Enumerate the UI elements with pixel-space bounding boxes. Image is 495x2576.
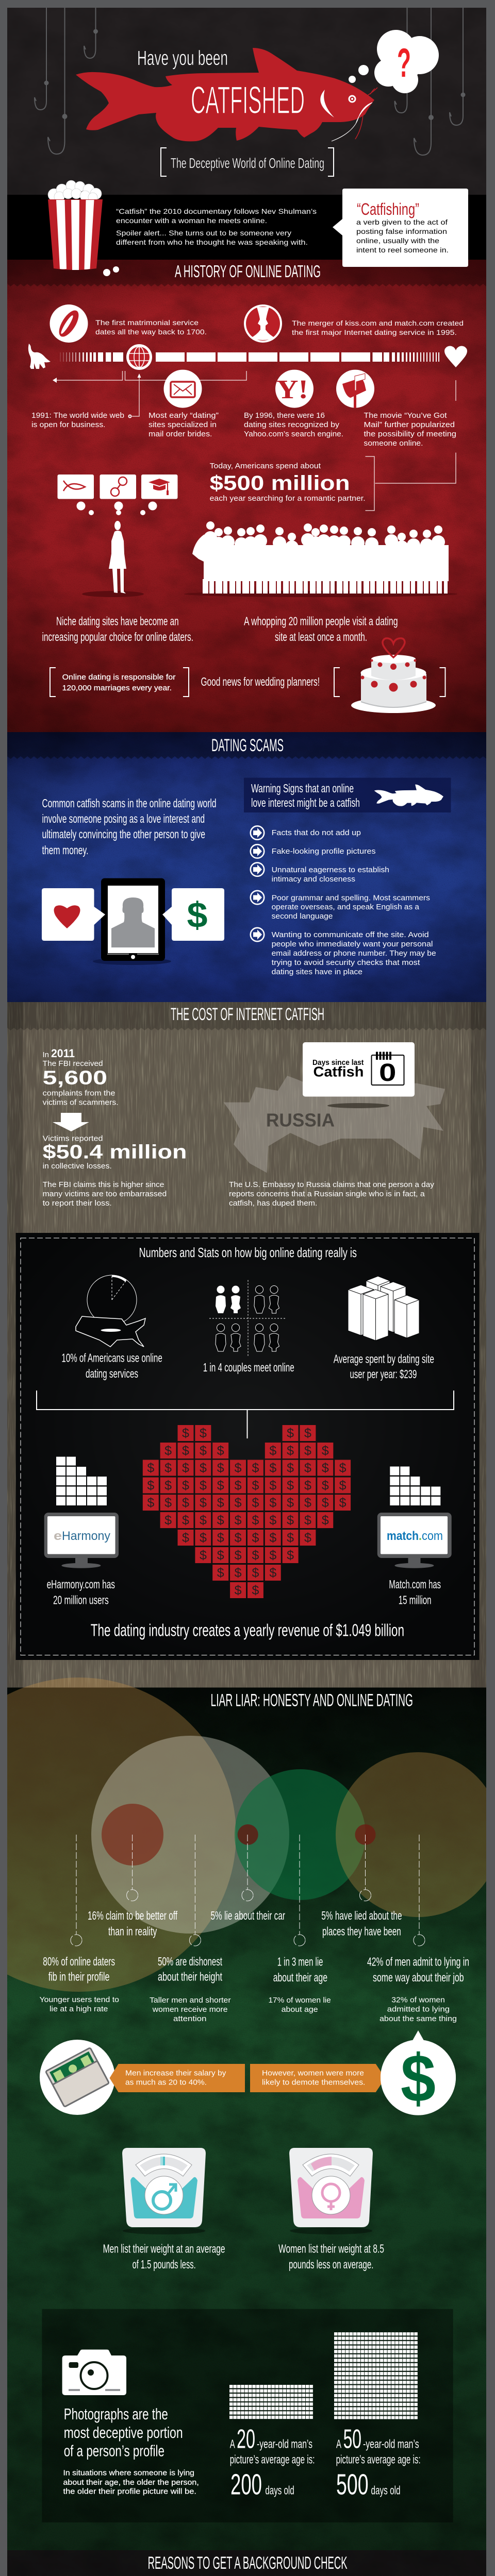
icon: crowd silhouette xyxy=(184,526,457,597)
text: match users: 15 million xyxy=(399,1593,431,1606)
bullet: eagerness xyxy=(251,862,389,884)
text: yahoo 1996 xyxy=(244,412,343,438)
title: catfished: CATFISHED xyxy=(191,78,305,122)
icon: woman silhouette xyxy=(82,521,144,597)
text: first matrimonial service xyxy=(95,318,207,336)
text: documentary intro: Spoiler alert... She turns out to be someone very xyxy=(116,229,291,237)
stat: eighty percent xyxy=(43,1955,115,1983)
bullet: off the site xyxy=(251,928,436,976)
panel: a history of online dating xyxy=(7,260,486,732)
text: average spent xyxy=(334,1352,434,1381)
blue background xyxy=(7,732,486,1002)
text: you've got mail xyxy=(364,412,456,448)
icon: globe xyxy=(126,344,152,370)
text: photographs heading: Photographs are the xyxy=(64,2405,168,2423)
list: warning signs xyxy=(251,826,436,976)
text: 1991 world wide web: 1991: The world wide web xyxy=(31,412,124,420)
stat: sixteen percent: than in reality xyxy=(108,1924,157,1938)
text: fbi claim xyxy=(43,1181,167,1208)
icon: eharmony monitor: Harmony xyxy=(62,1529,110,1543)
dark background xyxy=(7,2550,486,2576)
callout: catfishing definition: posting false information xyxy=(356,227,447,235)
shadow under sign xyxy=(327,1103,389,1108)
icon: heart xyxy=(444,346,467,367)
stat: 20 year old: A xyxy=(230,2437,235,2451)
panel: numbers and stats xyxy=(16,1233,480,1660)
text: eharmony users xyxy=(47,1578,115,1606)
panel: the cost of internet catfish xyxy=(7,1002,486,1688)
connector lines xyxy=(57,371,456,511)
subtitle with brackets: The Deceptive World of Online Dating xyxy=(171,155,324,171)
text: us embassy: catfish, has duped them. xyxy=(229,1199,317,1208)
chart: heart of dollars: $$$$$$$$$$ xyxy=(164,1513,329,1528)
text: mail order brides: Most early “dating” xyxy=(148,412,219,420)
icon: thought dots xyxy=(76,502,157,515)
text: documentary intro: encounter with a woman he meets online. xyxy=(116,216,267,225)
bullet: eagerness: intimacy and closeness xyxy=(272,875,355,884)
note: women job: 32% of women xyxy=(391,1996,445,2005)
stat: age: 1 in 3 men lie xyxy=(277,1955,323,1968)
callout: men salary: Men increase their salary by xyxy=(125,2069,226,2077)
icon: wedding ring circle xyxy=(50,304,88,343)
text: men weight: Men list their weight at an average xyxy=(103,2242,225,2256)
stats: victim losses xyxy=(43,1134,187,1171)
bullet: off the site: Wanting to communicate off the site. Avoid xyxy=(272,931,429,939)
stat: places xyxy=(321,1909,402,1938)
text: good news: Good news for wedding planners! xyxy=(201,675,320,688)
chart: heart of dollars: $$$$ xyxy=(217,1566,276,1580)
bullet: eagerness: Unnatural eagerness to establish xyxy=(272,866,389,874)
stat: 20 year old: 20 xyxy=(237,2425,255,2454)
text: kiss.com and match.com merger: The merger of kiss.com and match.com created xyxy=(292,319,464,327)
text: documentary intro: “Catfish” the 2010 documentary follows Nev Shulman’s xyxy=(116,207,317,215)
text: you've got mail: Mail” further popularized xyxy=(364,421,455,429)
text: 20 million visitors: A whopping 20 million people visit a dating xyxy=(244,615,398,628)
icon: match monitor xyxy=(377,1513,452,1568)
heading: DATING SCAMS xyxy=(211,736,284,755)
text: mail order brides: mail order brides. xyxy=(148,430,212,438)
stats: FBI complaints xyxy=(42,1047,119,1107)
text: eharmony users: eHarmony.com has xyxy=(47,1578,115,1591)
stats: FBI complaints: 2011 xyxy=(51,1047,75,1060)
panel: reasons to get a background check xyxy=(7,2550,486,2576)
text: ten percent xyxy=(61,1351,162,1380)
icon: yahoo circle xyxy=(275,370,314,408)
icon: match monitor: com xyxy=(422,1529,443,1543)
text: kiss.com and match.com merger: the first major Internet dating service in 1995. xyxy=(292,328,457,336)
stats: victim losses: $50.4 million xyxy=(43,1142,187,1163)
stat: age xyxy=(273,1955,327,1984)
stat: sixteen percent: 16% claim to be better off xyxy=(88,1909,177,1922)
icon: faces and vase circle xyxy=(244,304,282,343)
text: common catfish scams xyxy=(42,796,217,857)
chalkboard background xyxy=(16,1233,480,1660)
stats: FBI complaints: complaints from the xyxy=(43,1090,116,1098)
text: photographs detail: the older their profile picture will be. xyxy=(63,2487,196,2496)
bullet: facts: Facts that do not add up xyxy=(272,829,361,837)
bullet: grammar: second language xyxy=(272,912,333,921)
chart: heart of dollars: $$$$$$$$$$$$ xyxy=(147,1479,346,1493)
note: women job: about the same thing xyxy=(380,2015,457,2023)
callout: 500 million: each year searching for a romantic partner. xyxy=(210,495,366,503)
chart: heart of dollars: $$$$ xyxy=(182,1426,311,1440)
note: younger users: Younger users tend to xyxy=(39,1996,119,2004)
arrow: down xyxy=(53,1113,89,1131)
text: men weight xyxy=(103,2242,225,2271)
icon: niche site squares xyxy=(58,474,177,499)
bullet: off the site: trying to avoid security checks that most xyxy=(272,959,420,967)
stat: 50 year old: picture’s average age is: xyxy=(336,2453,421,2466)
sign: days since last catfish: Catfish xyxy=(314,1064,364,1080)
text: ten percent: 10% of Americans use online xyxy=(61,1351,162,1365)
text: us embassy xyxy=(229,1181,435,1208)
heading: THE COST OF INTERNET CATFISH xyxy=(171,1005,324,1024)
text: match users: Match.com has xyxy=(389,1578,441,1591)
text: us embassy: reports concerns that a Russian single who is in fact, a xyxy=(229,1190,425,1198)
stat: 20 year old: picture’s average age is: xyxy=(230,2453,315,2466)
sign: days since last catfish: Days since last xyxy=(312,1059,364,1067)
panel: dating scams xyxy=(7,732,486,1002)
stat: eighty percent: fib in their profile xyxy=(48,1970,109,1983)
panel: header xyxy=(7,8,486,195)
stats: victim losses: Victims reported xyxy=(43,1134,103,1143)
callout: women demote xyxy=(250,2064,385,2092)
note: taller men: attention xyxy=(173,2015,206,2023)
callout: men salary: as much as 20 to 40%. xyxy=(125,2078,207,2087)
text: photographs heading: most deceptive portion xyxy=(64,2424,183,2442)
icon: dollar circle: $ xyxy=(401,2040,436,2116)
text: 20 million visitors: site at least once a month. xyxy=(275,630,367,643)
text: you've got mail: someone online. xyxy=(364,439,423,448)
icon: yahoo circle: Y! xyxy=(276,375,308,404)
callout: catfishing definition: “Catfishing” xyxy=(357,200,419,218)
bullet: off the site: people who immediately want your personal xyxy=(272,940,433,948)
text: eharmony users: 20 million users xyxy=(53,1593,109,1606)
stat: 50 year old xyxy=(336,2425,421,2501)
icon: eharmony monitor xyxy=(44,1513,119,1568)
stat: 50 year old: 50 xyxy=(343,2425,361,2454)
text: photographs detail: about their age, the older the person, xyxy=(63,2479,199,2487)
callout: catfishing definition: intent to reel someone in. xyxy=(356,246,449,254)
icon: male scale xyxy=(122,2148,206,2234)
icon: thought bubble with question mark: ? xyxy=(397,40,411,86)
text: us embassy: The U.S. Embassy to Russia claims that one person a day xyxy=(229,1181,435,1189)
chart: pie over usa map xyxy=(76,1275,145,1347)
text: niche dating sites: Niche dating sites have become an xyxy=(56,615,179,628)
stat: height xyxy=(158,1955,222,1983)
subtitle with brackets xyxy=(161,148,334,176)
text: average spent: user per year: $239 xyxy=(350,1367,417,1381)
text: 20 million visitors xyxy=(244,615,398,643)
sign: days since last catfish: 0 xyxy=(379,1059,396,1087)
text: fbi claim: The FBI claims this is higher since xyxy=(43,1181,164,1189)
chart: 500 days grid xyxy=(334,2332,418,2419)
icon: dinosaur xyxy=(28,344,51,369)
note: women age: about age xyxy=(282,2006,318,2014)
text: 1991 world wide web: is open for business. xyxy=(31,421,105,429)
stats: FBI complaints: 5,600 xyxy=(43,1067,107,1089)
stat: 50 year old: 500 xyxy=(336,2468,369,2501)
bullet: grammar: Poor grammar and spelling. Most scammers xyxy=(272,894,430,902)
text: yahoo 1996: By 1996, there were 16 xyxy=(244,412,325,420)
arrows on connectors xyxy=(53,374,141,418)
sign: days since last catfish xyxy=(303,1042,415,1096)
icon: eharmony monitor: e xyxy=(54,1529,62,1543)
text: fbi claim: to report their loss. xyxy=(43,1199,112,1208)
stat: places: places they have been xyxy=(322,1924,401,1938)
note: women job xyxy=(380,1996,457,2023)
text: photographs detail: In situations where someone is lying xyxy=(63,2469,194,2478)
stats: FBI complaints: The FBI received xyxy=(43,1060,103,1068)
text: documentary intro: different from who he thought he was speaking with. xyxy=(116,238,308,246)
stat: eighty percent: 80% of online daters xyxy=(43,1955,115,1968)
icon: fallen popcorn xyxy=(103,266,119,276)
stat: age: about their age xyxy=(273,1971,327,1984)
chart: eharmony users blocks xyxy=(56,1461,107,1501)
note: women age xyxy=(268,1996,331,2014)
map: russia: RUSSIA xyxy=(266,1110,335,1130)
text: niche dating sites: increasing popular choice for online daters. xyxy=(42,630,193,643)
stats: victim losses: in collective losses. xyxy=(43,1162,112,1171)
stat: 50 year old: A xyxy=(336,2437,341,2451)
note: women job: admitted to lying xyxy=(387,2005,450,2013)
text: common catfish scams: ultimately convincing the other person to give xyxy=(42,827,205,841)
chart: heart of dollars xyxy=(143,1426,351,1598)
text: mail order brides xyxy=(148,412,219,438)
icon: tablet with heart and dollar cards xyxy=(42,878,224,965)
map: russia xyxy=(224,1076,445,1173)
text: average spent: Average spent by dating site xyxy=(334,1352,434,1366)
header background xyxy=(7,8,486,195)
chart: match users blocks xyxy=(390,1471,440,1501)
text: yahoo 1996: Yahoo.com’s search engine. xyxy=(244,430,343,438)
panel: liar liar xyxy=(0,1677,495,2550)
callout: women demote: However, women were more xyxy=(262,2069,364,2077)
callout: 500 million xyxy=(210,462,366,503)
callout: men salary xyxy=(109,2064,245,2092)
text: photographs detail xyxy=(63,2469,199,2496)
icon: female scale xyxy=(289,2148,373,2234)
callout: catfishing definition: a verb given to the act of xyxy=(356,218,448,226)
text: yahoo 1996: dating sites recognized by xyxy=(244,421,340,429)
text: one in four: 1 in 4 couples meet online xyxy=(203,1361,294,1374)
callout: women demote: likely to demote themselves. xyxy=(262,2078,365,2087)
chart: stacks of money xyxy=(348,1276,419,1341)
text: women weight: Women list their weight at 8.5 xyxy=(278,2242,384,2256)
chart: heart of dollars: $$$$$$$$$$$$ xyxy=(147,1461,346,1476)
text: you've got mail: the possibility of meeting xyxy=(364,430,456,438)
text: kiss.com and match.com merger xyxy=(292,319,464,336)
text: women weight xyxy=(278,2242,384,2271)
chart: one in four couples xyxy=(209,1280,286,1357)
heading: A HISTORY OF ONLINE DATING xyxy=(175,262,321,281)
icon: envelope circle xyxy=(164,370,202,408)
chart: heart of dollars: $$$$$$$$ xyxy=(164,1444,329,1458)
icon: match monitor: match xyxy=(387,1529,419,1543)
chart: 200 days grid xyxy=(229,2385,314,2419)
text: photographs heading xyxy=(64,2405,183,2460)
stat: 20 year old: days old xyxy=(265,2484,294,2497)
text: mail order brides: sites specialized in xyxy=(148,421,217,429)
text: photographs heading: of a person’s profile xyxy=(64,2442,164,2460)
icon: match monitor: . xyxy=(419,1529,422,1543)
callout: warning signs header: love interest might be a catfish xyxy=(251,796,360,809)
text: you've got mail: The movie “You’ve Got xyxy=(364,412,447,420)
icon: fishing hooks xyxy=(35,8,465,155)
bullet: facts xyxy=(251,826,361,840)
note: younger users: lie at a high rate xyxy=(50,2005,108,2013)
stat: places: 5% have lied about the xyxy=(321,1909,402,1922)
text: common catfish scams: Common catfish scams in the online dating world xyxy=(42,796,217,810)
dashed leader lines xyxy=(71,1835,425,1946)
stat: 50 year old: days old xyxy=(371,2484,400,2497)
stat: sixteen percent xyxy=(88,1909,177,1938)
stat: job xyxy=(367,1955,469,1984)
text: ten percent: dating services xyxy=(86,1367,138,1380)
timeline bar xyxy=(60,352,439,362)
stat: 50 year old: -year-old man’s xyxy=(363,2437,419,2451)
wood background xyxy=(7,1002,486,1688)
chart: overlapping circles xyxy=(0,1677,495,1992)
callout: warning signs header xyxy=(244,778,451,812)
icon: wedding cake xyxy=(334,638,446,713)
text: common catfish scams: them money. xyxy=(42,843,89,857)
text: documentary intro xyxy=(116,207,317,246)
chart: heart of dollars: $$ xyxy=(235,1583,259,1598)
icon: wallet xyxy=(40,2040,115,2115)
text: women weight: pounds less on average. xyxy=(289,2258,373,2271)
text: common catfish scams: involve someone posing as a love interest and xyxy=(42,812,205,825)
note: taller men: women receive more xyxy=(152,2006,227,2014)
panel: intro band xyxy=(7,195,486,260)
bullet: off the site: email address or phone number. They may be xyxy=(272,950,436,958)
stat: car: 5% lie about their car xyxy=(210,1909,285,1922)
text: match users xyxy=(389,1578,441,1606)
stat: height: 50% are dishonest xyxy=(158,1955,222,1968)
dark box xyxy=(42,2309,453,2522)
callout: warning signs header: Warning Signs that an online xyxy=(251,782,354,795)
stats: FBI complaints: victims of scammers. xyxy=(43,1099,119,1107)
chart: heart of dollars: $$$$$$$$$$$$ xyxy=(147,1496,346,1510)
callout: 500 million: Today, Americans spend about xyxy=(210,462,321,470)
red background xyxy=(7,260,486,732)
band background xyxy=(7,195,486,260)
panel: photographs xyxy=(42,2309,453,2522)
callout: 120,000 marriages xyxy=(50,668,189,697)
icon: thought bubble with question mark xyxy=(349,30,439,93)
note: women age: 17% of women lie xyxy=(268,1996,331,2005)
chart: heart of dollars: $$$$$$$$ xyxy=(182,1531,311,1545)
stat: 20 year old: 200 xyxy=(230,2468,262,2501)
callout: 120,000 marriages: 120,000 marriages every year. xyxy=(62,684,172,692)
bullet: grammar xyxy=(251,891,430,921)
stat: height: about their height xyxy=(158,1970,222,1983)
text: fbi claim: many victims are too embarrassed xyxy=(43,1190,167,1198)
callout: 120,000 marriages: Online dating is responsible for xyxy=(62,673,176,682)
icon: catfish xyxy=(76,48,377,141)
note: taller men xyxy=(150,1996,231,2023)
heading: Numbers and Stats on how big online dating really is xyxy=(139,1245,357,1260)
stat: 20 year old: -year-old man’s xyxy=(257,2437,312,2451)
chart: heart of dollars: $$$$$$ xyxy=(200,1548,294,1563)
text: niche dating sites xyxy=(42,615,193,643)
bullet: pictures xyxy=(251,844,376,858)
stats: FBI complaints: In xyxy=(42,1050,49,1059)
icon: camera xyxy=(62,2349,126,2395)
icon: tablet with heart and dollar cards: $ xyxy=(187,895,207,935)
title: have you been: Have you been xyxy=(137,47,228,70)
green background xyxy=(7,1688,486,2550)
text: first matrimonial service: dates all the way back to 1700. xyxy=(95,328,207,336)
bullet: grammar: operate overseas, and speak English as a xyxy=(272,903,420,911)
bullet: off the site: dating sites have in place xyxy=(272,968,362,976)
callout: catfishing definition: online, usually with the xyxy=(356,236,439,245)
icon: popcorn box xyxy=(48,180,103,270)
text: first matrimonial service: The first matrimonial service xyxy=(95,318,199,327)
callout: catfishing definition xyxy=(333,189,468,267)
callout: 500 million: $500 million xyxy=(210,472,350,495)
stat: 20 year old xyxy=(230,2425,315,2501)
text: men weight: of 1.5 pounds less. xyxy=(133,2258,196,2271)
note: younger users xyxy=(39,1996,119,2013)
icon: mailbox circle xyxy=(336,370,374,408)
text: 1991 world wide web xyxy=(31,412,124,429)
note: taller men: Taller men and shorter xyxy=(150,1996,231,2005)
icon: dollar circle xyxy=(381,2030,456,2116)
bracket xyxy=(37,1391,454,1438)
bullet: pictures: Fake-looking profile pictures xyxy=(272,848,376,856)
